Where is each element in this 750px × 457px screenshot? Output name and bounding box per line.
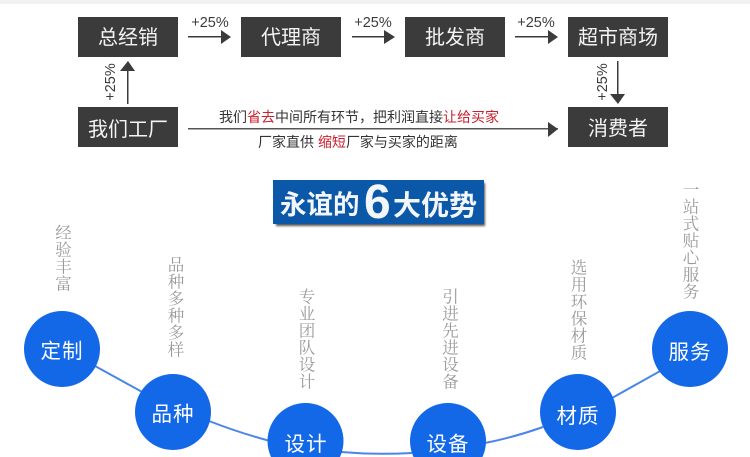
arrow: 代理商 to 批发商: +25% (354, 15, 392, 31)
arrow: 超市商场 down to 消费者 (595, 61, 625, 104)
arrow: 总经销 to 代理商: +25% (191, 15, 229, 31)
title banner: 大优势 (393, 190, 477, 221)
node: 服务 (652, 311, 728, 387)
node: 设备 (410, 403, 486, 457)
box: 批发商: 批发商 (425, 26, 485, 49)
node: 服务: 服务 (668, 341, 712, 364)
arrow: 总经销 to 代理商 (188, 15, 231, 44)
caption: 经验丰富: 经验丰富 (52, 224, 72, 292)
node: 设计 (268, 403, 344, 457)
box: 超市商场 (568, 17, 668, 57)
title banner (273, 176, 485, 229)
caption: 品种多种多样: 品种多种多样 (165, 256, 184, 358)
box: 总经销: 总经销 (98, 26, 158, 49)
box: 消费者 (568, 107, 668, 147)
node: 定制: 定制 (40, 340, 84, 363)
text: direct path lower line: 厂家直供 缩短厂家与买家的距离 (258, 134, 458, 150)
caption: 引进先进设备: 引进先进设备 (440, 288, 459, 390)
node: 设备: 设备 (426, 433, 470, 456)
node: 材质 (540, 374, 616, 450)
box: 我们工厂: 我们工厂 (88, 118, 168, 141)
caption: 专业团队设计: 专业团队设计 (296, 288, 315, 390)
arrow: 我们工厂 up to 总经销 (103, 61, 135, 104)
box: 代理商 (241, 17, 341, 57)
node: 材质: 材质 (556, 405, 600, 428)
box: 消费者: 消费者 (588, 117, 648, 140)
arrow: 批发商 to 超市商场: +25% (517, 15, 555, 31)
connecting curve (95, 366, 662, 454)
box: 代理商: 代理商 (261, 26, 321, 49)
arrow: 我们工厂 direct to 消费者 (188, 122, 558, 137)
box: 我们工厂 (78, 107, 178, 147)
arrow: 超市商场 down to 消费者: +25% (595, 63, 611, 101)
node: 品种: 品种 (152, 403, 194, 426)
title banner: 永谊的 (280, 190, 360, 220)
node: 设计: 设计 (284, 433, 328, 456)
node: 定制 (24, 311, 100, 387)
node: 品种 (135, 374, 211, 450)
box: 批发商 (405, 17, 505, 57)
caption: 一站式贴心服务: 一站式贴心服务 (680, 181, 699, 300)
box: 超市商场: 超市商场 (578, 26, 658, 49)
title banner: 6 (364, 176, 391, 229)
caption: 选用环保材质: 选用环保材质 (568, 259, 587, 362)
box: 总经销 (78, 17, 178, 57)
arrow: 代理商 to 批发商 (352, 15, 395, 44)
arrow: 批发商 to 超市商场 (515, 15, 558, 44)
text: direct path upper line: 我们省去中间所有环节，把利润直接让给买家 (219, 109, 499, 125)
arrow: 我们工厂 up to 总经销: +25% (103, 63, 119, 101)
